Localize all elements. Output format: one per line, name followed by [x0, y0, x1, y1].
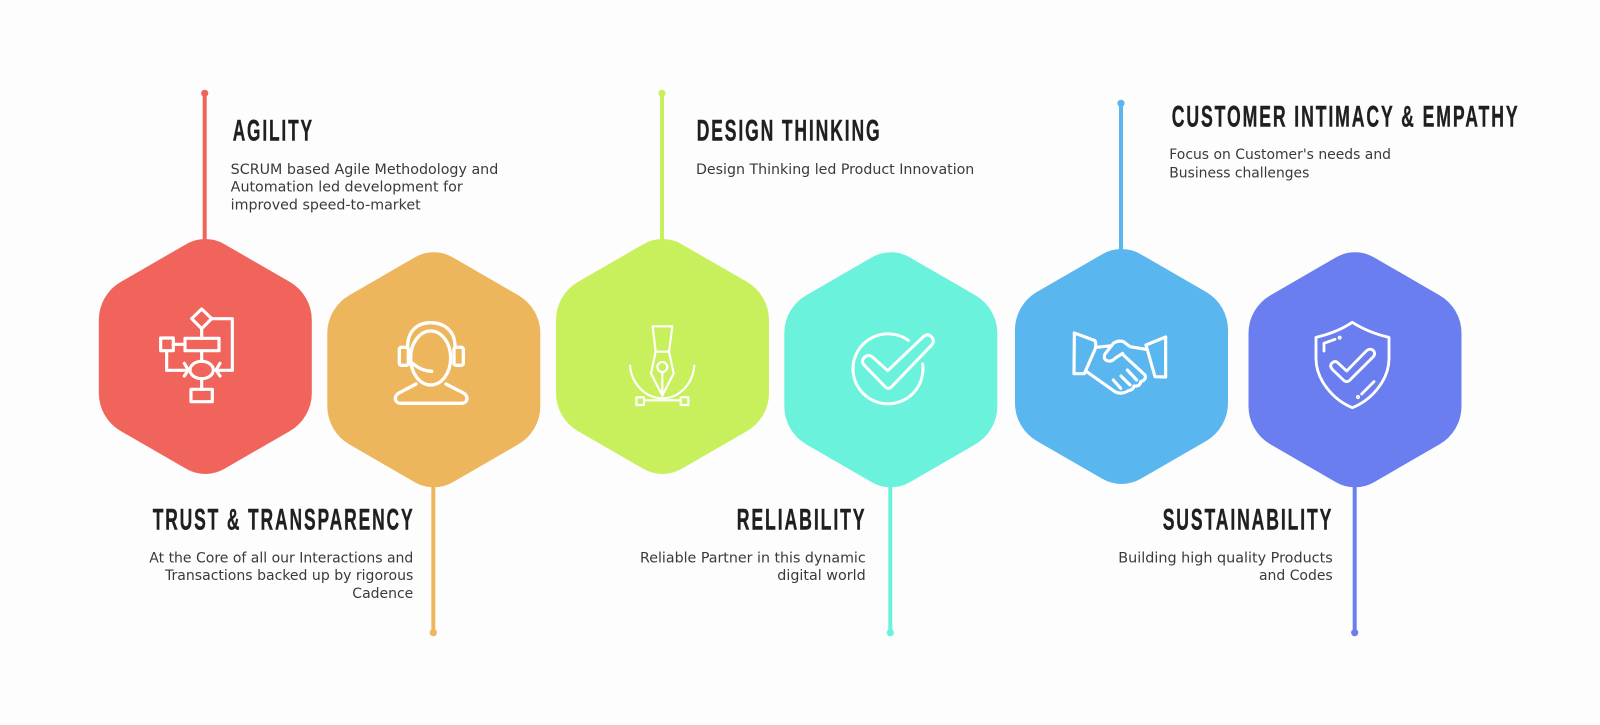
- icon: pen nib: [630, 326, 694, 405]
- connector: reliability: [887, 480, 894, 636]
- description: agility: SCRUM based Agile Methodology and: [231, 162, 498, 178]
- heading: trust: TRUST & TRANSPARENCY: [153, 503, 414, 536]
- panel: design thinking: [556, 90, 974, 474]
- panel: trust and transparency: [149, 252, 540, 636]
- hexagon: sustainability: [1248, 252, 1462, 487]
- connector: customer intimacy: [1117, 100, 1125, 253]
- description: customer intimacy: Focus on Customer's needs and: [1169, 147, 1391, 163]
- panel: reliability: [640, 252, 997, 636]
- heading: agility: AGILITY: [233, 115, 314, 148]
- connector: design thinking: [658, 90, 666, 243]
- description: agility: improved speed-to-market: [231, 197, 421, 213]
- description: design thinking: Design Thinking led Product Innovation: [696, 162, 974, 178]
- description: sustainability: and Codes: [1259, 568, 1333, 584]
- hexagon: customer intimacy: [1015, 249, 1228, 484]
- heading: sustainability: SUSTAINABILITY: [1163, 503, 1333, 536]
- hexagon: agility: [99, 239, 312, 474]
- icon: circled check: [853, 334, 933, 404]
- description: reliability: Reliable Partner in this dynamic: [640, 550, 866, 566]
- panel: customer intimacy and empathy: [1015, 100, 1520, 484]
- description: sustainability: Building high quality Products: [1118, 550, 1333, 566]
- connector: sustainability: [1351, 480, 1358, 636]
- description: customer intimacy: Business challenges: [1169, 165, 1309, 181]
- icon: handshake: [1074, 333, 1166, 393]
- description: trust: Transactions backed up by rigorous: [164, 568, 413, 584]
- connector: trust: [430, 480, 437, 636]
- connector: agility: [201, 90, 208, 243]
- description: trust: Cadence: [352, 586, 413, 602]
- description: agility: Automation led development for: [231, 180, 463, 196]
- panel: sustainability: [1118, 252, 1462, 636]
- description: trust: At the Core of all our Interactions and: [149, 550, 413, 566]
- heading: design thinking: DESIGN THINKING: [697, 115, 882, 148]
- description: reliability: digital world: [777, 568, 866, 584]
- icon: headset agent: [395, 323, 467, 403]
- icon: flowchart: [161, 309, 232, 402]
- heading: reliability: RELIABILITY: [737, 503, 866, 536]
- icon: shield with check: [1316, 322, 1389, 408]
- hexagon: reliability: [784, 252, 997, 487]
- hexagon: design thinking: [556, 239, 769, 474]
- hexagon: trust: [327, 252, 540, 487]
- panel: agility: [99, 90, 498, 474]
